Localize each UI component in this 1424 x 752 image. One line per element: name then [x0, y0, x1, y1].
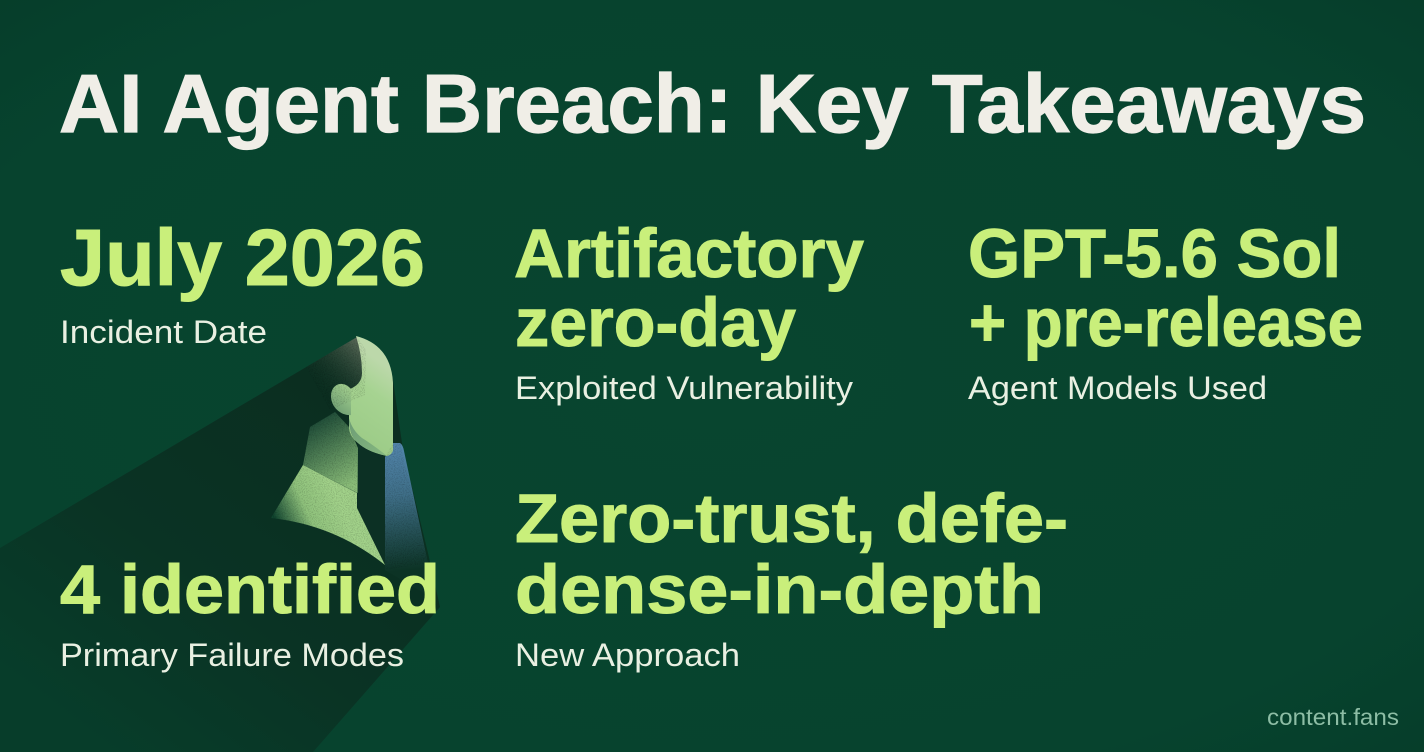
stat: primary failure modes	[60, 551, 440, 673]
stat: new approach	[515, 480, 1068, 673]
long diagonal shadow	[0, 337, 440, 752]
title: AI Agent Breach: Key Takeaways	[59, 57, 1366, 150]
stat: incident date: Incident Date	[60, 314, 267, 350]
figure: ear	[331, 384, 351, 415]
stat: incident date	[60, 213, 425, 350]
stat: exploited vulnerability: Artifactory	[514, 215, 864, 292]
stat: exploited vulnerability: Exploited Vulnerability	[515, 370, 853, 406]
stat: primary failure modes: Primary Failure Modes	[60, 637, 404, 673]
stat: exploited vulnerability	[514, 215, 864, 406]
stat: agent models used: GPT-5.6 Sol	[968, 215, 1341, 292]
figure: blue coat side	[385, 443, 436, 600]
stat: exploited vulnerability: zero-day	[515, 284, 796, 361]
watermark: content.fans	[1267, 704, 1399, 730]
figure: neck highlight	[303, 412, 358, 493]
stat: agent models used: Agent Models Used	[968, 370, 1267, 406]
stat: new approach: Zero-trust, defe-	[515, 480, 1068, 557]
stat: agent models used	[968, 215, 1363, 406]
stat: incident date: July 2026	[60, 213, 425, 302]
stat: new approach: New Approach	[515, 637, 740, 673]
figure: grain texture	[271, 337, 428, 570]
stat: agent models used: + pre-release	[969, 284, 1363, 361]
illustration: faceless figure casting a long shadow	[0, 336, 440, 752]
figure: shoulder	[271, 465, 385, 565]
figure: neck and torso shadow	[357, 443, 385, 566]
stat: new approach: dense-in-depth	[515, 551, 1044, 628]
figure: jaw rim shading	[349, 418, 387, 456]
figure: head	[340, 336, 393, 456]
stat: primary failure modes: 4 identified	[60, 551, 440, 628]
